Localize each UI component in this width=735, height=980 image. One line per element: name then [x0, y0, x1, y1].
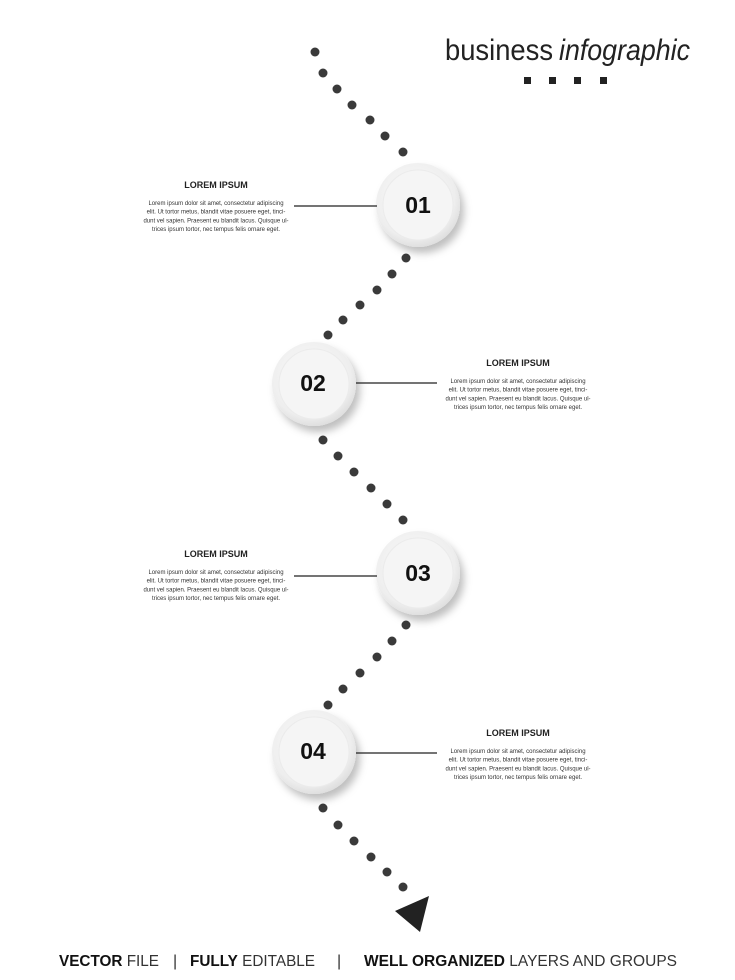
- title: business: [445, 34, 553, 67]
- text block 03: trices ipsum tortor, nec tempus felis ornare eget.: [152, 596, 280, 602]
- text block 03: LOREM IPSUM: [184, 549, 248, 559]
- footer: [59, 953, 677, 970]
- dotted path: [310, 48, 410, 892]
- text block 04: elit. Ut tortor metus, blandit vitae posuere eget, tinci-: [449, 758, 587, 764]
- step 02 circle: [272, 342, 356, 426]
- title: infographic: [559, 34, 690, 67]
- text block 01: dunt vel sapien. Praesent eu blandit lacus. Quisque ul-: [143, 218, 289, 224]
- text block 01: elit. Ut tortor metus, blandit vitae posuere eget, tinci-: [147, 210, 285, 216]
- text block 02: trices ipsum tortor, nec tempus felis ornare eget.: [454, 405, 582, 411]
- text block 01: trices ipsum tortor, nec tempus felis ornare eget.: [152, 227, 280, 233]
- text block 01: LOREM IPSUM: [184, 180, 248, 190]
- text block 01: [143, 180, 289, 233]
- step 03 circle: 03: [405, 560, 431, 586]
- text block 03: [143, 549, 289, 602]
- text block 03: Lorem ipsum dolor sit amet, consectetur adipiscing: [148, 570, 284, 576]
- text block 04: [445, 728, 591, 781]
- text block 02: [445, 358, 591, 411]
- text block 01: Lorem ipsum dolor sit amet, consectetur adipiscing: [148, 201, 284, 207]
- footer: |: [337, 953, 341, 970]
- step 03 circle: [376, 531, 460, 615]
- arrowhead: [395, 896, 429, 932]
- connector lines: [294, 206, 437, 753]
- step 01 circle: 01: [405, 192, 431, 218]
- step 02 circle: 02: [300, 370, 326, 396]
- title: [445, 34, 690, 67]
- title decoration squares: [524, 77, 607, 84]
- footer: VECTOR FILE: [59, 953, 159, 970]
- footer: FULLY EDITABLE: [190, 953, 315, 970]
- text block 04: dunt vel sapien. Praesent eu blandit lacus. Quisque ul-: [445, 766, 591, 772]
- step 01 circle: [376, 163, 460, 247]
- text block 03: elit. Ut tortor metus, blandit vitae posuere eget, tinci-: [147, 579, 285, 585]
- text block 02: dunt vel sapien. Praesent eu blandit lacus. Quisque ul-: [445, 396, 591, 402]
- footer: WELL ORGANIZED LAYERS AND GROUPS: [364, 953, 677, 970]
- text block 04: LOREM IPSUM: [486, 728, 550, 738]
- text block 02: elit. Ut tortor metus, blandit vitae posuere eget, tinci-: [449, 388, 587, 394]
- text block 04: Lorem ipsum dolor sit amet, consectetur adipiscing: [450, 749, 586, 755]
- text block 04: trices ipsum tortor, nec tempus felis ornare eget.: [454, 775, 582, 781]
- text block 02: LOREM IPSUM: [486, 358, 550, 368]
- footer: |: [173, 953, 177, 970]
- step 04 circle: 04: [300, 738, 326, 764]
- step 04 circle: [272, 710, 356, 794]
- text block 03: dunt vel sapien. Praesent eu blandit lacus. Quisque ul-: [143, 587, 289, 593]
- text block 02: Lorem ipsum dolor sit amet, consectetur adipiscing: [450, 379, 586, 385]
